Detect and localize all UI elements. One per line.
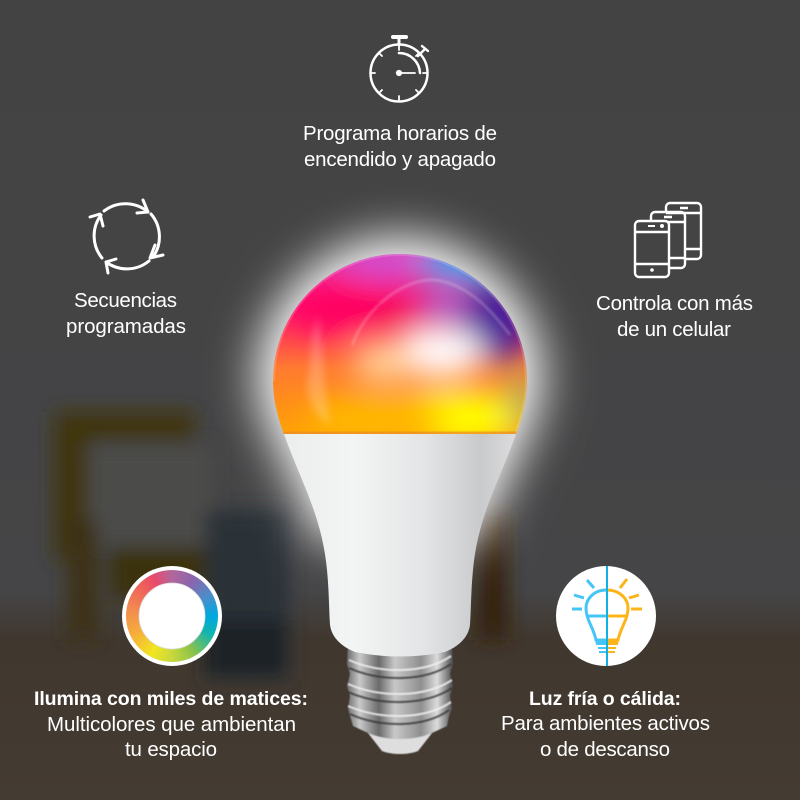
- icon: cycle arrows: [90, 200, 163, 273]
- text: colours: Ilumina con miles de matices:: [34, 688, 308, 710]
- text: colours: tu espacio: [125, 738, 217, 761]
- text: sequences: programadas: [66, 315, 186, 338]
- feature: schedule: [303, 37, 497, 171]
- text: warm or cold: Luz fría o cálida:: [529, 688, 681, 710]
- text: sequences: [66, 289, 186, 338]
- icon: stopwatch: [370, 37, 428, 102]
- text: schedule: [303, 122, 497, 171]
- colour globe: [273, 254, 527, 434]
- screw base: [347, 645, 453, 754]
- text: schedule: encendido y apagado: [304, 148, 496, 171]
- feature: sequences: [66, 200, 186, 338]
- text: multi phone: de un celular: [617, 318, 731, 341]
- icon: colour ring: [122, 566, 222, 666]
- white body: [284, 434, 516, 656]
- text: multi phone: Controla con más: [596, 292, 753, 315]
- text: warm or cold: Para ambientes activos: [501, 712, 710, 735]
- icon: phones: [635, 203, 701, 277]
- text: colours: Multicolores que ambientan: [47, 713, 296, 736]
- text: warm or cold: [501, 688, 710, 761]
- feature: colours: [34, 566, 308, 761]
- text: sequences: Secuencias: [74, 289, 177, 312]
- text: schedule: Programa horarios de: [303, 122, 497, 145]
- text: warm or cold: o de descanso: [540, 738, 670, 761]
- bulb: [273, 254, 527, 755]
- icon: half bulb: [556, 566, 656, 666]
- text: colours: [34, 688, 308, 761]
- feature: multi phone: [596, 203, 753, 341]
- feature: warm or cold: [501, 566, 710, 761]
- bulb glow: [268, 248, 532, 530]
- text: multi phone: [596, 292, 753, 341]
